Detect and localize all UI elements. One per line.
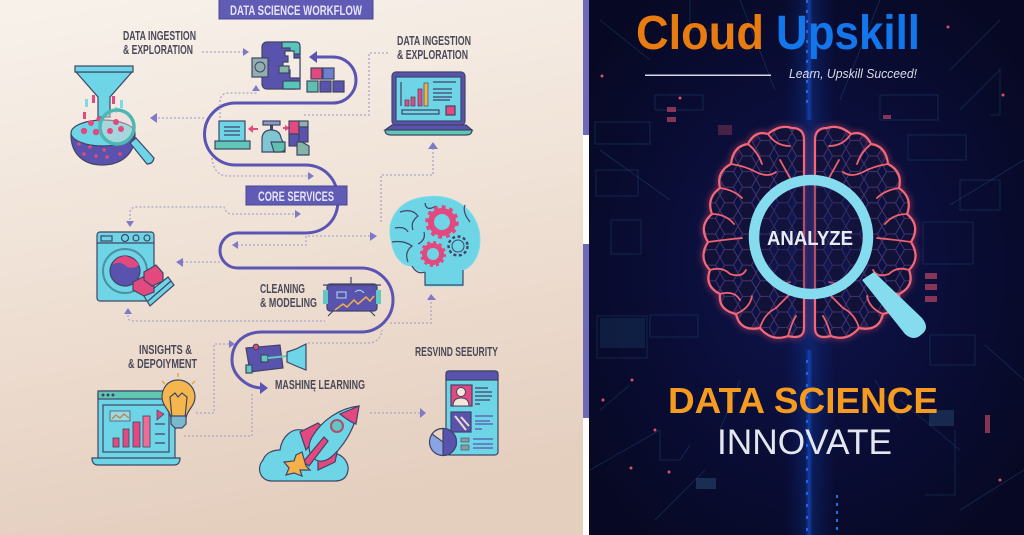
- title banner: data science workflow: [219, 0, 373, 19]
- icon: electronics board with robot arm: [246, 344, 306, 373]
- brain folds: [708, 134, 911, 336]
- label: data ingestion left: DATA INGESTION: [123, 29, 196, 43]
- right lobe: [815, 127, 916, 338]
- label: ANALYZE: ANALYZE: [767, 228, 853, 250]
- icon: brain with gears: [390, 196, 480, 286]
- label: cleaning and modeling: [260, 282, 317, 310]
- divider strip between panels: [583, 0, 590, 535]
- icon: magnifying glass: [754, 180, 926, 338]
- label: data ingestion right: DATA INGESTION: [397, 34, 471, 48]
- icon: document printer: [215, 121, 250, 149]
- heading: DATA SCIENCE: DATA SCIENCE: [668, 380, 938, 421]
- icon: rocket on cloud: [260, 406, 359, 481]
- label: insights and deployment: [128, 343, 197, 371]
- icon: puzzle block: [252, 42, 300, 89]
- label: data ingestion right: & EXPLORATION: [397, 48, 468, 62]
- banner: core services: CORE SERVICES: [258, 188, 334, 204]
- icon: data blocks and file: [289, 121, 309, 155]
- arrowheads on serpentine path: [260, 51, 317, 394]
- banner: core services: [246, 186, 347, 205]
- decorative circuit lines and data boxes: [590, 0, 1024, 520]
- tagline with rule: Learn, Upskill Succeed!: [789, 67, 918, 81]
- icon: data valve: [262, 121, 285, 152]
- icon: light bulb: [162, 373, 195, 428]
- glowing vertical data beam: [785, 0, 837, 535]
- dotted connector arrows: [124, 48, 438, 436]
- left lobe: [703, 127, 804, 338]
- logo: Cloud Upskill: Upskill: [776, 7, 920, 60]
- panel: dark data science poster background: [589, 0, 1024, 535]
- label: cleaning and modeling: CLEANING: [260, 282, 305, 296]
- subheading: INNOVATE: INNOVATE: [717, 423, 892, 462]
- icon: laptop with bar chart: [385, 72, 472, 135]
- panel: workflow infographic: [71, 0, 498, 481]
- icon: pink arrows: [248, 125, 290, 133]
- brain glow: [703, 127, 916, 338]
- label: data ingestion left: & EXPLORATION: [123, 43, 193, 57]
- label: data ingestion right: [397, 34, 471, 62]
- icon: washing machine with sponge: [97, 232, 174, 306]
- serpentine workflow path: [205, 57, 393, 388]
- logo: Cloud Upskill: [636, 7, 920, 60]
- label: data ingestion left: [123, 29, 196, 57]
- icon: profile phone with pie chart: [430, 371, 498, 456]
- label: security: RESVIND SEEURITY: [415, 345, 498, 359]
- logo: Cloud Upskill: Cloud: [636, 7, 764, 60]
- label: insights and deployment: & DEPOIYMENT: [128, 357, 197, 371]
- icon: laptop dashboard with bar chart: [92, 391, 180, 465]
- icon: circuit board with chart line: [323, 277, 381, 316]
- title banner: data science workflow: DATA SCIENCE WORKFLOW: [230, 2, 363, 18]
- panel: workflow infographic background: [0, 0, 584, 535]
- icon: neon brain: [703, 127, 916, 338]
- label: insights and deployment: INSIGHTS &: [139, 343, 192, 357]
- label: machine learning: MASHINĘ LEARNING: [275, 378, 365, 392]
- label: cleaning and modeling: & MODELING: [260, 296, 317, 310]
- icon: stacked data squares: [307, 68, 344, 92]
- icon: funnel and bowl with magnifier: [71, 66, 154, 165]
